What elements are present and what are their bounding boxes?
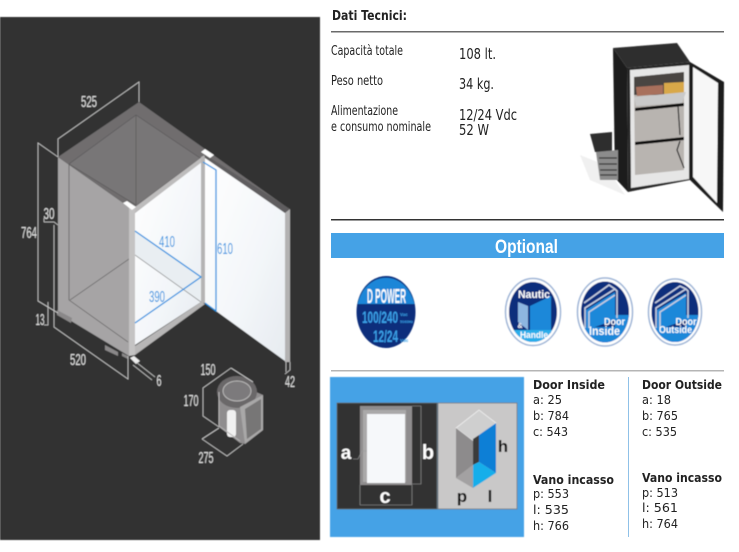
heading: Dati Tecnici: Dati Tecnici:: [332, 9, 407, 24]
column: Door Inside measures: Door Inside: [533, 378, 605, 392]
badge: D Power: 12/24: [373, 327, 398, 346]
diagram: recess p l h: l: [488, 487, 492, 506]
banner: Optional: [331, 233, 724, 258]
badge: D Power: [356, 276, 416, 348]
diagram: door a b c: [337, 403, 437, 509]
diagram: door a b c: b: [422, 442, 434, 464]
specs values: [459, 45, 517, 139]
badge: D Power: 50/60Hz: [400, 319, 413, 324]
badge: D Power: D POWER: [367, 286, 406, 308]
dimension labels: 610: [217, 241, 233, 258]
icon: Nautic & Handle: Handle: [520, 330, 548, 341]
column: Door Outside measures: a: 18: [642, 393, 671, 407]
icon: Door Inside: Door: [604, 317, 625, 328]
specs values: 108 lt.: [459, 45, 496, 63]
compressor drawing: 275: [198, 450, 214, 467]
rule above dimensions panel: [331, 370, 724, 372]
column: Door Outside measures: Door Outside: [642, 378, 722, 392]
dimension labels: 13: [36, 312, 44, 329]
column: Door Outside measures: b: 765: [642, 409, 678, 423]
white dimension lines: [38, 82, 290, 380]
compressor drawing: 170: [184, 393, 199, 410]
panel: dark technical drawing: [0, 17, 320, 540]
diagram: recess p l h: h: [498, 437, 508, 456]
column: Door Outside measures: h: 764: [642, 517, 678, 531]
specs values: 12/24 Vdc: [459, 106, 517, 124]
specs values: 34 kg.: [459, 75, 494, 93]
column: Door Outside measures: c: 535: [642, 425, 677, 439]
icon: Door Outside: [648, 279, 702, 345]
specs labels: [331, 44, 431, 135]
icon: Door Inside: [578, 278, 632, 346]
rule above Optional: [331, 219, 724, 220]
diagram: recess p l h: p: [457, 487, 467, 506]
product photo: fridge with open door: [580, 43, 724, 212]
rule under heading: [331, 31, 724, 32]
column: Door Inside measures: p: 553: [533, 487, 569, 501]
specs values: 52 W: [459, 121, 489, 139]
icon: Nautic & Handle: Nautic: [518, 289, 550, 301]
badge: D Power: 100/240: [362, 308, 398, 327]
icon: Door Inside: Inside: [589, 324, 620, 338]
badge: D Power: Vac: [400, 312, 408, 317]
specs labels: Alimentazione: [331, 104, 398, 119]
badge: D Power: Vdc: [400, 338, 409, 343]
dimension labels: 525: [81, 94, 97, 111]
specs labels: Capacità totale: [331, 44, 403, 59]
column: Door Outside measures: Vano incasso: [642, 471, 722, 485]
dimension labels: 764: [21, 225, 37, 242]
column: Door Inside measures: c: 543: [533, 425, 568, 439]
column: Door Inside measures: l: 535: [533, 503, 569, 517]
banner: Optional: Optional: [495, 237, 558, 258]
column: Door Inside measures: Vano incasso: [533, 473, 614, 487]
specs labels: e consumo nominale: [331, 120, 431, 135]
divider between columns: [628, 377, 629, 537]
dimension labels: 520: [70, 352, 86, 369]
column: Door Outside measures: p: 513: [642, 486, 678, 500]
column: Door Outside measures: l: 561: [642, 501, 678, 515]
icon: Nautic & Handle: &: [517, 323, 523, 330]
compressor drawing: 150: [200, 362, 216, 379]
icon: Door Outside: Outside: [659, 325, 692, 336]
blue inner dimension lines: [135, 162, 216, 323]
dimension labels: 410: [159, 234, 175, 251]
column: Door Inside measures: a: 25: [533, 393, 562, 407]
dimension labels: 42: [285, 374, 295, 391]
column: Door Inside measures: h: 766: [533, 519, 569, 533]
compressor drawing: [184, 362, 263, 467]
dimension labels: 6: [156, 373, 162, 390]
column: Door Inside measures: [533, 378, 614, 533]
fridge isometric drawing: [57, 102, 290, 364]
diagram: recess p l h: [438, 403, 517, 509]
dimension labels: 30: [44, 206, 55, 223]
column: Door Outside measures: [642, 378, 722, 531]
specs labels: Peso netto: [331, 74, 383, 89]
column: Door Inside measures: b: 784: [533, 409, 569, 423]
dimension labels: [21, 94, 295, 391]
icon: Nautic & Handle: [505, 278, 561, 346]
diagram: door a b c: a: [341, 443, 352, 464]
diagram: door a b c: c: [379, 486, 391, 508]
dimension labels: 390: [149, 289, 165, 306]
panel: door cut-out diagrams: [330, 377, 524, 537]
icon: Door Outside: Door: [676, 317, 697, 328]
